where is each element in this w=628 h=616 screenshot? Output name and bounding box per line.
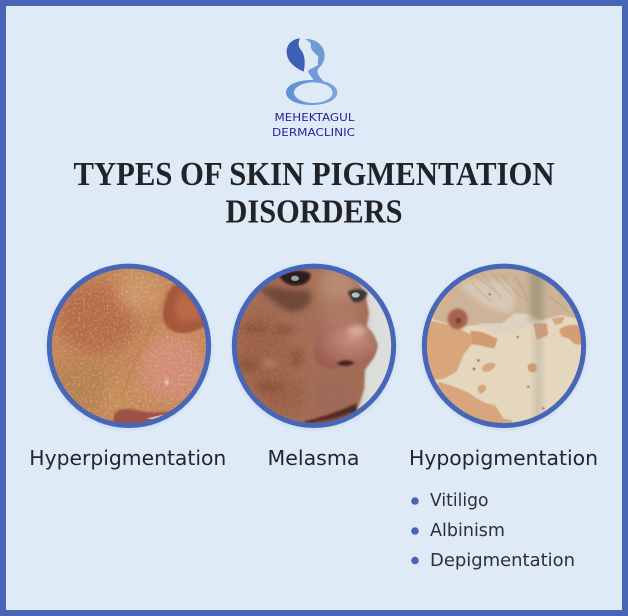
- ring: [424, 266, 584, 425]
- ring: [49, 266, 209, 425]
- icon: logo face and ring: [286, 38, 337, 105]
- label: Melasma: [268, 446, 360, 470]
- logo: Mehektagul Dermaclinic: [272, 38, 355, 139]
- title: DISORDERS: [226, 194, 402, 230]
- panel: hyperpigmentation: [29, 262, 226, 470]
- logo wordmark line 2: DERMACLINIC: [272, 127, 355, 139]
- photo: melasma on an older face: [231, 262, 398, 430]
- label: Hypopigmentation: [409, 446, 598, 470]
- bullet list of hypopigmentation types: [411, 491, 575, 571]
- ring: [234, 266, 394, 425]
- logo wordmark line 1: MEHEKTAGUL: [274, 112, 355, 124]
- title: [74, 156, 554, 230]
- panel: melasma: [231, 262, 398, 470]
- photo: hyperpigmented cheek and nostril: [46, 262, 213, 432]
- panel: hypopigmentation: [409, 262, 598, 571]
- item: Vitiligo: Vitiligo: [430, 491, 488, 511]
- photo: depigmented patches on chest: [421, 262, 588, 432]
- title: TYPES OF SKIN PIGMENTATION: [74, 156, 554, 193]
- label: Hyperpigmentation: [29, 446, 226, 470]
- item: Depigmentation: Depigmentation: [430, 551, 575, 571]
- item: Albinism: Albinism: [430, 521, 505, 541]
